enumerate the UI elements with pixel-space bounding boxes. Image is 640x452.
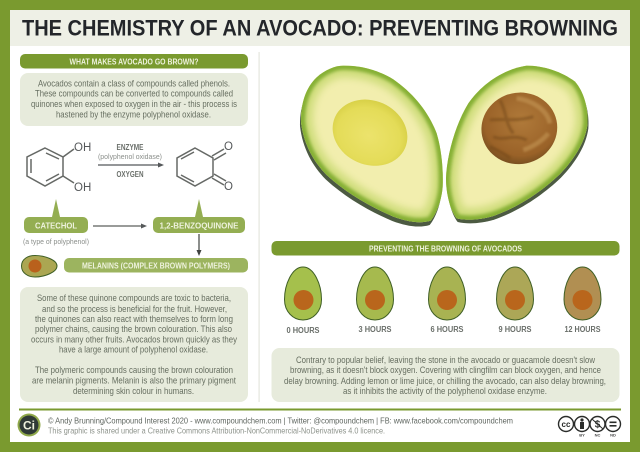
avocado timeline: [284, 267, 601, 335]
text panel: intro: hastened by the enzyme polyphenol oxidase.: [56, 110, 211, 120]
molecule: 1,2-benzoquinone: O: [224, 141, 233, 153]
avocado: 12 hours: 12 HOURS: [564, 325, 601, 334]
avocado: 12 hours: [564, 267, 601, 334]
reaction arrow with labels: ENZYME: [116, 143, 144, 152]
molecule: 1,2-benzoquinone: O: [224, 181, 233, 193]
text panel: quinones and melanin: The polymeric compounds causing the brown colouration: [35, 365, 233, 375]
licence icons: BY: [579, 432, 585, 438]
text panel: preventing browning: Contrary to popular belief, leaving the stone in the avocado or guacamole doesn't slow: [296, 355, 595, 365]
footer credits: This graphic is shared under a Creative Commons Attribution-NonCommercial-NoDerivatives 4.0 licence.: [48, 426, 385, 436]
footer rule: [19, 408, 621, 410]
photo: halved avocado: [300, 66, 588, 227]
heading: what makes avocado go brown: [20, 54, 248, 68]
footer credits: [48, 416, 513, 436]
label: 1,2-benzoquinone: 1,2-BENZOQUINONE: [160, 220, 239, 230]
heading: preventing the browning: [272, 241, 620, 256]
heading: what makes avocado go brown: WHAT MAKES AVOCADO GO BROWN?: [70, 56, 198, 66]
avocado: 3 hours: 3 HOURS: [358, 325, 392, 334]
text panel: preventing browning: [272, 348, 620, 402]
label: catechol: [24, 199, 88, 233]
text panel: quinones and melanin: Some of these quinone compounds are toxic to bacteria,: [37, 293, 231, 303]
text panel: intro: Avocados contain a class of compounds called phenols.: [38, 78, 230, 88]
molecule: 1,2-benzoquinone: [177, 141, 233, 193]
licence icons: $: [595, 420, 601, 430]
logo: compound interest: [18, 414, 40, 436]
avocado: 0 hours: 0 HOURS: [286, 326, 320, 335]
label: melanins: [64, 258, 248, 272]
avocado: 3 hours: [356, 267, 394, 334]
text panel: quinones and melanin: occurs in many other fruits. Avocados brown quickly as they: [31, 334, 237, 344]
text panel: intro: quinones when exposed to oxygen in the air - this process is: [31, 99, 237, 109]
reaction arrow with labels: OXYGEN: [116, 170, 144, 179]
icon: browned avocado: [22, 256, 57, 277]
text panel: quinones and melanin: and so the process is beneficial for the fruit. However,: [42, 304, 227, 314]
heading: preventing the browning: PREVENTING THE BROWNING OF AVOCADOS: [369, 243, 522, 253]
text panel: quinones and melanin: are melanin pigments. Melanin is also the primary pigment: [32, 376, 236, 386]
licence icons: [558, 416, 620, 438]
left half with hollow: [300, 66, 443, 227]
logo: compound interest: Ci: [23, 418, 35, 432]
arrow: benzoquinone to melanins: [196, 234, 202, 256]
text panel: intro: [20, 73, 248, 126]
footer credits: © Andy Brunning/Compound Interest 2020 - www.compoundchem.com | Twitter: @compoundchem | FB: www.facebook.com/compoundchem: [48, 416, 513, 426]
text panel: quinones and melanin: determining skin colour in humans.: [73, 386, 194, 396]
text panel: quinones and melanin: polymer chains, causing the brown colouration. This also: [35, 324, 232, 334]
reaction arrow with labels: [98, 143, 164, 179]
avocado: 9 hours: [496, 267, 534, 334]
caption: a type of polyphenol: (a type of polyphenol): [23, 237, 89, 246]
label: melanins: MELANINS (COMPLEX BROWN POLYMERS): [82, 260, 230, 270]
text panel: quinones and melanin: the quinones can also react with themselves to form long: [35, 314, 233, 324]
avocado: 0 hours: [284, 267, 322, 335]
licence icons: ND: [610, 432, 616, 438]
title band: [10, 10, 630, 46]
arrow: catechol to benzoquinone: [93, 224, 147, 228]
text panel: quinones and melanin: [20, 287, 248, 402]
text panel: preventing browning: as it inhibits the activity of the polyphenol oxidase enzyme.: [343, 386, 547, 396]
label: catechol: CATECHOL: [35, 220, 77, 230]
column divider: [258, 52, 260, 402]
molecule: catechol: [27, 142, 91, 194]
molecule: catechol: OH: [74, 142, 91, 154]
text panel: quinones and melanin: have a large amount of polyphenol oxidase.: [59, 344, 208, 354]
avocado: 9 hours: 9 HOURS: [498, 325, 532, 334]
licence icons: cc: [562, 420, 571, 429]
label: 1,2-benzoquinone: [153, 199, 245, 233]
avocado: 6 hours: 6 HOURS: [430, 325, 464, 334]
right half with stone: [446, 66, 588, 223]
avocado: 6 hours: [428, 267, 466, 334]
molecule: catechol: OH: [74, 182, 91, 194]
reaction arrow with labels: (polyphenol oxidase): [98, 152, 162, 161]
text panel: intro: These compounds can be converted to compounds called: [35, 88, 233, 98]
licence icons: NC: [595, 432, 600, 438]
